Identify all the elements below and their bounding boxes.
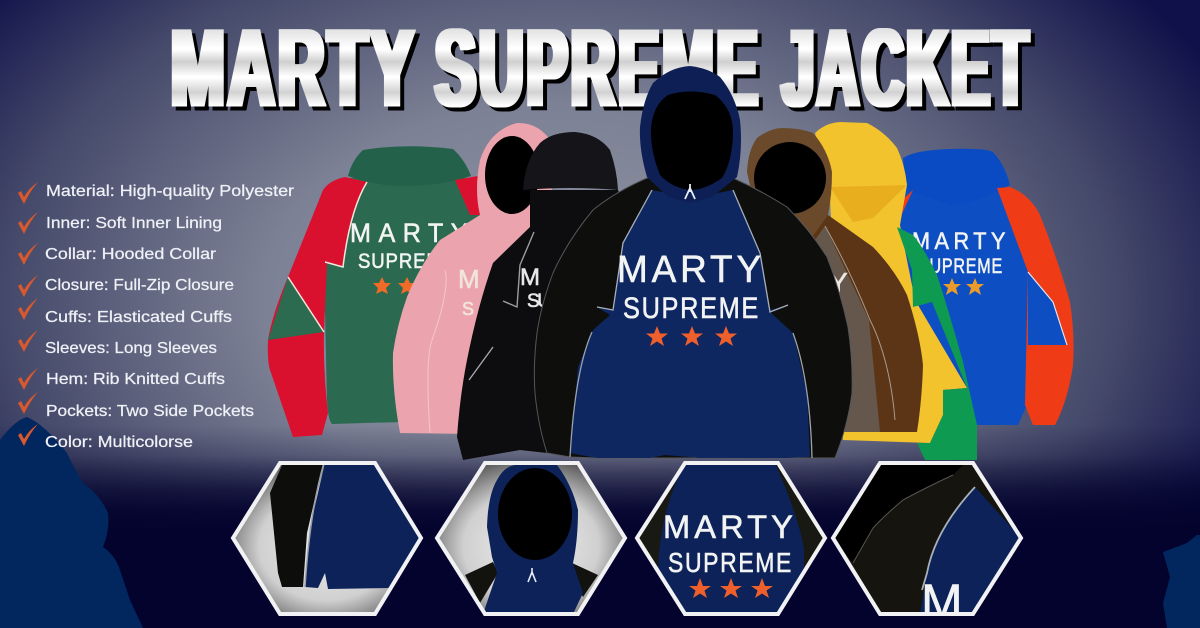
jacket: navy and black front (534, 66, 852, 458)
check item: color: Color: Multicolorse (45, 434, 193, 451)
check item: hem: Hem: Rib Knitted Cuffs (46, 371, 225, 388)
jacket: yellow and green (815, 122, 977, 460)
jacket: green and red: MARTY (350, 218, 475, 248)
check item: collar: Collar: Hooded Collar (45, 246, 217, 263)
jacket: blue and orange (900, 149, 1074, 425)
detail hexagon: chest logo: MARTY (663, 509, 797, 545)
check item: color (18, 424, 193, 451)
check item: material: Material: High-quality Polyester (46, 183, 295, 200)
check item: closure (18, 275, 234, 297)
check item: cuffs: Cuffs: Elasticated Cuffs (45, 309, 232, 326)
detail hexagon: hood (437, 463, 625, 614)
check item: sleeves: Sleeves: Long Sleeves (45, 340, 217, 357)
jacket: pink: S (462, 299, 474, 319)
detail hexagon: chest logo: SUPREME (668, 547, 793, 578)
jacket: brown (747, 128, 923, 432)
check item: hem (18, 368, 225, 390)
check item: sleeves (18, 330, 217, 357)
detail hexagon: pocket and cuff (233, 463, 421, 614)
jacket: pink (393, 123, 560, 435)
check item: pockets (18, 392, 254, 420)
jacket: brown: Y (829, 267, 848, 298)
jacket: black (457, 132, 640, 460)
decorative blue shape bottom right (1163, 535, 1200, 628)
jacket: pink: M (458, 264, 480, 294)
check item: collar (18, 243, 217, 265)
jacket: black: SU (527, 291, 551, 312)
jacket: black: MA (520, 264, 570, 291)
detail hexagon: chest logo (637, 463, 825, 614)
title: MARTY (175, 11, 421, 134)
detail hexagon: shoulder seam (833, 463, 1021, 628)
check item: closure: Closure: Full-Zip Closure (45, 277, 234, 294)
title: SUPREME (439, 11, 765, 134)
jacket: blue and orange: MARTY (912, 228, 1010, 255)
check item: inner: Inner: Soft Inner Lining (46, 215, 222, 232)
check item: inner (18, 212, 222, 234)
feature checklist (18, 182, 295, 451)
check item: cuffs (18, 298, 232, 326)
jacket: navy and black front: SUPREME (623, 292, 760, 325)
jacket: green and red: SUPREME (358, 250, 456, 273)
check item: material (18, 182, 295, 204)
jacket: blue and orange: SUPREME (918, 255, 1003, 278)
title: SUPREME (435, 7, 761, 130)
decorative blue shape bottom left (0, 417, 143, 628)
check item: pockets: Pockets: Two Side Pockets (46, 403, 254, 420)
title: MARTY (171, 7, 417, 130)
jacket: navy and black front: MARTY (617, 249, 765, 291)
title (171, 7, 1035, 134)
jacket: green and red (268, 146, 490, 437)
